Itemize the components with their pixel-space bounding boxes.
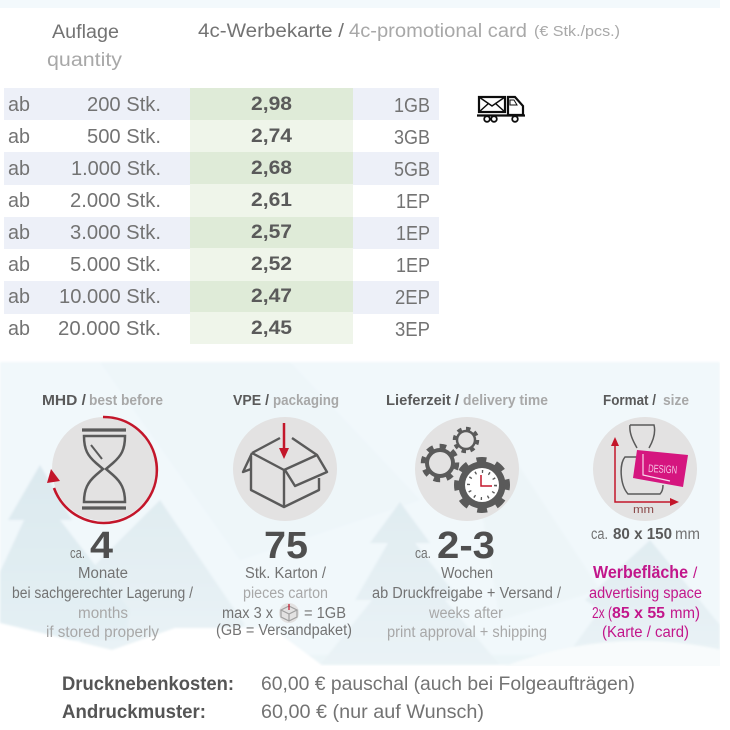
advertising space: Werbefläche — [593, 562, 688, 582]
icon: format card: DESIGN — [648, 463, 677, 477]
footer: additional costs: Drucknebenkosten: — [62, 673, 234, 695]
advertising space: (Karte / card) — [602, 624, 689, 641]
table rows: stripes — [4, 88, 439, 344]
heading: VPE — [233, 392, 339, 409]
heading: Lieferzeit: Lieferzeit / — [386, 392, 460, 409]
heading: Format — [603, 392, 689, 409]
panel: packaging — [216, 392, 352, 639]
heading: MHD: best before — [89, 392, 163, 409]
heading: MHD — [42, 392, 163, 409]
description: (GB = Versandpaket) — [216, 622, 352, 639]
column header: product: 4c-Werbekarte / — [198, 21, 345, 42]
max note: = 1GB — [304, 605, 346, 622]
description: Wochen — [441, 565, 493, 582]
background panel: winter scene — [0, 362, 722, 668]
advertising space: 2x ( — [592, 605, 613, 622]
icon: small box — [279, 603, 299, 623]
advertising space: 85 x 55 — [612, 605, 665, 622]
column: shipping unit: 1GB — [394, 95, 430, 117]
description: pieces carton — [243, 585, 328, 602]
max note — [222, 605, 346, 622]
column: ab: ab — [8, 318, 30, 340]
icon: hourglass — [47, 417, 157, 523]
dimensions: 80 x 150 — [613, 526, 672, 543]
column: prices: 2,98 — [251, 94, 292, 115]
column: ab: ab — [8, 190, 30, 212]
value: 75: 75 — [264, 525, 308, 567]
advertising space — [589, 562, 702, 641]
white lower area — [0, 666, 730, 730]
column: prices: 2,68 — [251, 158, 292, 179]
column header: product: (€ Stk./pcs.) — [534, 23, 620, 40]
column: shipping unit — [394, 95, 430, 341]
heading: MHD: MHD / — [42, 392, 87, 409]
icon: format card: mm — [633, 504, 654, 516]
column header: quantity — [47, 22, 123, 71]
column: prices — [251, 94, 292, 339]
snow hills — [0, 623, 323, 666]
description — [12, 565, 194, 641]
column: ab: ab — [8, 158, 30, 180]
description — [216, 565, 352, 639]
column: ab: ab — [8, 222, 30, 244]
column header: product — [198, 21, 620, 42]
column: shipping unit: 3GB — [394, 127, 430, 149]
column: shipping unit: 1EP — [396, 255, 430, 277]
description: months — [78, 605, 128, 622]
column: quantities: 2.000 Stk. — [70, 190, 161, 212]
value: 4 months — [70, 525, 113, 567]
max note: max 3 x — [222, 605, 273, 622]
column: quantities: 1.000 Stk. — [71, 158, 161, 180]
price table — [4, 21, 620, 344]
value: 2-3 weeks: 2-3 — [437, 525, 495, 567]
column: prices: 2,74 — [251, 126, 292, 147]
advertising space: mm) — [670, 605, 700, 622]
column: quantities: 3.000 Stk. — [70, 222, 161, 244]
column: ab — [8, 94, 30, 340]
icon: mail truck — [477, 97, 525, 122]
heading: Lieferzeit — [386, 392, 548, 409]
column: prices: 2,45 — [251, 318, 292, 339]
footer: additional costs — [62, 673, 635, 723]
column: shipping unit: 3EP — [395, 319, 430, 341]
icon: box — [233, 417, 337, 521]
top strip — [0, 0, 720, 8]
footer: additional costs: Andruckmuster: — [62, 701, 206, 723]
column: prices: 2,52 — [251, 254, 292, 275]
column: shipping unit: 2EP — [395, 287, 430, 309]
value: 4 months: ca. — [70, 545, 85, 562]
heading: Lieferzeit: delivery time — [463, 392, 548, 409]
dimensions — [591, 526, 700, 543]
description — [372, 565, 562, 641]
column: shipping unit: 5GB — [394, 159, 430, 181]
column: ab: ab — [8, 286, 30, 308]
panel: size — [589, 392, 702, 641]
column: prices: 2,61 — [251, 190, 292, 211]
white right margin — [720, 0, 730, 730]
icon: gears and clock — [415, 417, 519, 521]
column: prices: 2,57 — [251, 222, 292, 243]
description: print approval + shipping — [387, 624, 547, 641]
value: 2-3 weeks — [415, 525, 495, 567]
column: ab: ab — [8, 254, 30, 276]
description: bei sachgerechter Lagerung / — [12, 585, 194, 602]
column header: quantity: quantity — [47, 50, 123, 71]
column: shipping unit: 1EP — [396, 191, 430, 213]
footer: additional costs: 60,00 € pauschal (auch bei Folgeaufträgen) — [261, 673, 635, 695]
column header: quantity: Auflage — [52, 22, 119, 43]
value: 2-3 weeks: ca. — [415, 545, 431, 562]
column header: product: 4c-promotional card — [349, 21, 527, 42]
value: 4 months: 4 — [90, 525, 113, 567]
column: prices: 2,47 — [251, 286, 292, 307]
panel: delivery time — [372, 392, 562, 641]
column: quantities: 10.000 Stk. — [59, 286, 161, 308]
heading: VPE: packaging — [273, 392, 339, 409]
icon: format card — [593, 417, 697, 521]
column: quantities: 20.000 Stk. — [58, 318, 161, 340]
column: quantities: 200 Stk. — [87, 94, 161, 116]
dimensions: ca. — [591, 526, 608, 543]
column: quantities — [58, 94, 161, 340]
column: quantities: 5.000 Stk. — [70, 254, 161, 276]
advertising space: advertising space — [589, 585, 702, 602]
panel: best before — [12, 392, 194, 641]
column: quantities: 500 Stk. — [87, 126, 161, 148]
footer: additional costs: 60,00 € (nur auf Wunsch) — [261, 701, 484, 723]
column: shipping unit: 1EP — [396, 223, 430, 245]
description: if stored properly — [46, 624, 159, 641]
description: Stk. Karton / — [245, 565, 327, 582]
heading: Format: Format / — [603, 392, 657, 409]
dimensions: mm — [675, 526, 700, 543]
description: Monate — [78, 565, 128, 582]
heading: Format: size — [663, 392, 689, 409]
advertising space: / — [693, 565, 698, 582]
column: ab: ab — [8, 94, 30, 116]
column: ab: ab — [8, 126, 30, 148]
heading: VPE: VPE / — [233, 392, 270, 409]
description: weeks after — [428, 605, 503, 622]
description: ab Druckfreigabe + Versand / — [372, 585, 562, 602]
